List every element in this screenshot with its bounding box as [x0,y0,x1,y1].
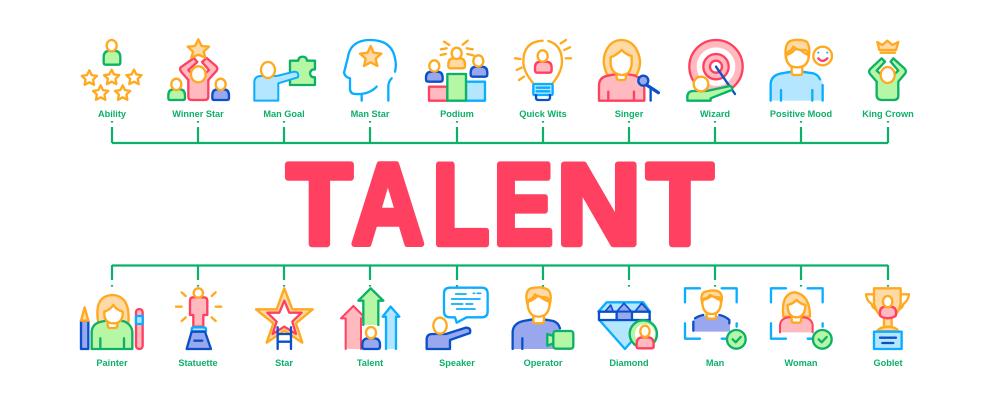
icon: talent arrows [341,288,399,349]
icon: star with ladder [256,288,313,349]
icon: king crown [869,41,906,100]
icon: quick wits [515,40,571,100]
icon: positive mood [771,40,832,101]
label: operator: Operator [524,358,563,368]
bottom connector lines [112,265,888,287]
label: man star: Man Star [351,109,390,119]
icon: speaker [427,288,488,349]
label: diamond: Diamond [609,358,649,368]
icon: woman check [771,288,832,349]
title: N [556,141,641,269]
label: talent: Talent [357,358,383,368]
label: ability: Ability [98,109,127,119]
title: A [352,141,424,269]
label: speaker: Speaker [439,358,475,368]
label: goblet: Goblet [873,358,903,368]
label: singer: Singer [615,109,644,119]
icon: man check [685,288,746,349]
icon: operator [513,287,573,349]
label: king crown: King Crown [862,109,914,119]
label: winner star: Winner Star [172,109,224,119]
icon: wizard target [687,40,743,101]
label: podium: Podium [440,109,474,119]
title: T [647,141,713,269]
label: star: Star [275,358,293,368]
label: woman: Woman [784,358,818,368]
icon: painter [81,295,143,349]
label: man: Man [706,358,725,368]
label: statuette: Statuette [178,358,218,368]
icon: podium [426,41,487,101]
icon: winner star [168,39,229,100]
title: E [494,141,553,269]
icon: diamond [598,302,657,349]
label: positive mood: Positive Mood [770,109,832,119]
icon: statuette [176,288,221,349]
icon: man goal [254,57,315,101]
icon: man star [344,40,396,101]
icon: singer [599,40,658,101]
label: painter: Painter [96,358,128,368]
title: T [287,141,352,269]
title: L [432,141,489,269]
icon: goblet [866,288,909,349]
label: wizard: Wizard [700,109,730,119]
label: quick wits: Quick Wits [519,109,567,119]
icon: ability [82,40,142,100]
label: man goal: Man Goal [263,109,305,119]
top connector lines [112,121,888,143]
